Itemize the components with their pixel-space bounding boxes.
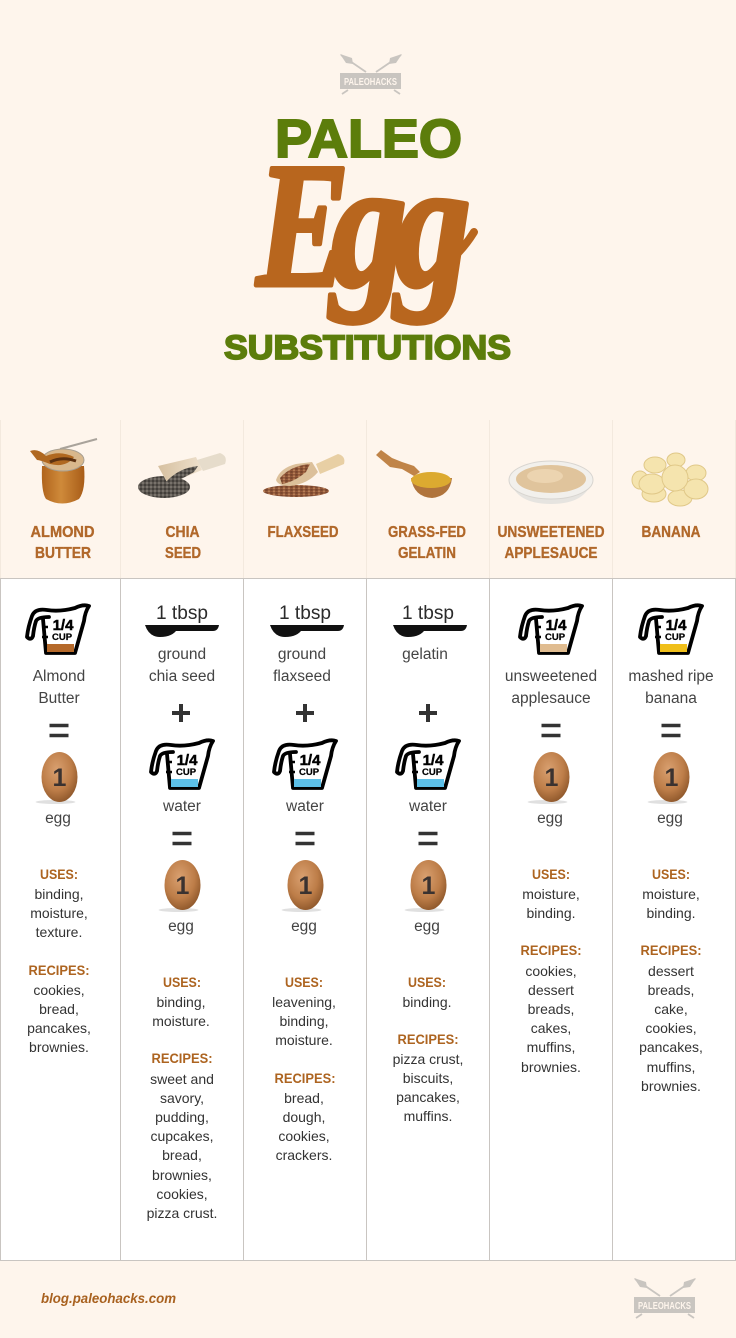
uses and recipes <box>520 867 582 1075</box>
icon: egg: 1 <box>545 764 559 792</box>
uses and recipes: USES: <box>40 867 78 882</box>
uses and recipes: moisture, <box>522 886 580 902</box>
icon: quarter cup: 1/4 <box>666 617 687 634</box>
icon: egg <box>528 752 570 804</box>
ingredient text: ground <box>278 646 326 663</box>
label: grass-fed gelatin: GRASS-FED <box>388 524 466 541</box>
uses and recipes: breads, <box>648 982 694 998</box>
uses and recipes: crackers. <box>276 1147 332 1163</box>
label: banana: BANANA <box>642 524 701 541</box>
ingredient text: ground <box>158 646 206 663</box>
uses and recipes: pancakes, <box>639 1039 703 1055</box>
icon: quarter cup <box>520 605 582 653</box>
uses and recipes: dessert <box>648 963 694 979</box>
equals sign <box>296 834 314 844</box>
uses and recipes: dessert <box>528 982 574 998</box>
uses and recipes: bread, <box>39 1001 79 1017</box>
uses and recipes: pizza crust, <box>393 1051 463 1067</box>
uses and recipes: cake, <box>654 1001 688 1017</box>
icon: egg <box>282 860 324 912</box>
icon: quarter cup water: 1/4 <box>423 752 444 769</box>
column: banana <box>628 453 714 1094</box>
uses and recipes: brownies, <box>152 1167 212 1183</box>
uses and recipes: moisture, <box>642 886 700 902</box>
icon: quarter cup water: 1/4 <box>177 752 198 769</box>
uses and recipes: pizza crust. <box>147 1205 217 1221</box>
uses and recipes: cookies, <box>278 1128 330 1144</box>
column: chia seed: water <box>162 798 201 815</box>
column: grass-fed gelatin <box>376 450 467 1124</box>
column: grass-fed gelatin: GELATIN <box>398 545 456 562</box>
photo: banana slices <box>632 453 708 506</box>
uses and recipes: breads, <box>528 1001 574 1017</box>
icon: quarter cup water <box>274 740 336 788</box>
uses and recipes: pudding, <box>155 1109 209 1125</box>
uses and recipes: binding, <box>156 994 206 1010</box>
uses and recipes: muffins. <box>404 1108 452 1124</box>
label: flaxseed: FLAXSEED <box>268 524 338 541</box>
title: Substitutions: SUBSTITUTIONS <box>224 329 511 367</box>
plus sign <box>296 704 314 722</box>
uses and recipes: muffins, <box>527 1039 575 1055</box>
ingredient text: gelatin <box>402 646 448 663</box>
icon: tablespoon: 1 tbsp <box>156 603 208 624</box>
uses and recipes: USES: <box>285 975 323 990</box>
icon: egg: 1 <box>422 872 436 900</box>
icon: quarter cup water: CUP <box>422 767 443 778</box>
equals sign <box>662 726 680 736</box>
icon: egg <box>404 860 446 912</box>
uses and recipes: pancakes, <box>396 1089 460 1105</box>
icon: egg <box>158 860 200 912</box>
ingredient text: mashed ripe <box>628 668 714 685</box>
equals sign <box>172 834 192 844</box>
uses and recipes: binding, <box>34 886 84 902</box>
icon: egg: 1 <box>176 872 190 900</box>
icon: quarter cup water <box>151 740 213 788</box>
icon: quarter cup: CUP <box>52 632 73 643</box>
icon: quarter cup water <box>397 740 459 788</box>
uses and recipes: RECIPES: <box>640 943 702 958</box>
column: unsweetened applesauce: egg <box>537 810 563 827</box>
icon: tablespoon: 1 tbsp <box>279 603 331 624</box>
column: almond butter: egg <box>45 810 71 827</box>
uses and recipes: cupcakes, <box>150 1128 214 1144</box>
uses and recipes: cookies, <box>33 982 85 998</box>
uses and recipes: cookies, <box>525 963 577 979</box>
uses and recipes: USES: <box>408 975 446 990</box>
icon: egg <box>648 752 690 804</box>
uses and recipes: brownies. <box>641 1078 701 1094</box>
equals sign <box>418 834 438 844</box>
column: unsweetened applesauce: applesauce <box>511 690 591 707</box>
equals sign <box>50 726 68 736</box>
uses and recipes <box>147 975 217 1221</box>
title: Egg: E <box>255 127 349 324</box>
icon: egg <box>36 752 78 804</box>
uses and recipes: leavening, <box>272 994 336 1010</box>
uses and recipes: moisture. <box>152 1013 210 1029</box>
uses and recipes: RECIPES: <box>398 1032 458 1047</box>
uses and recipes: pancakes, <box>27 1020 91 1036</box>
column: unsweetened applesauce <box>498 461 604 1075</box>
icon: quarter cup <box>640 605 702 653</box>
photo: almond butter jar <box>30 439 97 504</box>
uses and recipes: moisture. <box>275 1032 333 1048</box>
uses and recipes: binding. <box>526 905 576 921</box>
icon: quarter cup: 1/4 <box>546 617 567 634</box>
uses and recipes: RECIPES: <box>520 943 582 958</box>
uses and recipes: binding. <box>646 905 696 921</box>
uses and recipes: binding, <box>279 1013 329 1029</box>
uses and recipes: USES: <box>532 867 570 882</box>
column: flaxseed <box>263 454 344 1163</box>
uses and recipes: cookies, <box>156 1186 208 1202</box>
plus sign <box>172 704 190 722</box>
column: chia seed: chia seed <box>149 668 215 685</box>
uses and recipes: brownies. <box>521 1059 581 1075</box>
ingredient text: unsweetened <box>505 668 597 685</box>
title: Egg <box>255 125 474 324</box>
icon: quarter cup <box>27 605 89 653</box>
icon: quarter cup: CUP <box>545 632 566 643</box>
icon: egg: 1 <box>665 764 679 792</box>
uses and recipes: USES: <box>652 867 690 882</box>
table body panel <box>0 578 736 1260</box>
icon: egg: 1 <box>299 872 313 900</box>
ingredient text: Almond <box>33 668 85 685</box>
column: almond butter <box>27 439 97 1055</box>
column: banana: egg <box>657 810 683 827</box>
icon: quarter cup: CUP <box>665 632 686 643</box>
icon: tablespoon <box>145 603 219 637</box>
footer url: blog.paleohacks.com <box>41 1291 176 1306</box>
title: Egg: g <box>328 125 407 324</box>
icon: quarter cup water: CUP <box>176 767 197 778</box>
photo: gelatin spoon <box>376 450 452 498</box>
label: almond butter: ALMOND <box>30 524 94 541</box>
title <box>224 109 511 367</box>
icon: quarter cup water: CUP <box>299 767 320 778</box>
uses and recipes: sweet and <box>150 1071 214 1087</box>
icon: tablespoon <box>270 603 344 637</box>
uses and recipes: moisture, <box>30 905 88 921</box>
uses and recipes: biscuits, <box>403 1070 453 1086</box>
uses and recipes: USES: <box>163 975 201 990</box>
column: chia seed: SEED <box>165 545 201 562</box>
uses and recipes: binding. <box>402 994 452 1010</box>
uses and recipes: RECIPES: <box>28 963 90 978</box>
column: grass-fed gelatin: egg <box>414 918 440 935</box>
label: chia seed: CHIA <box>166 524 200 541</box>
photo: chia seed scoop <box>138 453 226 498</box>
column: grass-fed gelatin: water <box>408 798 447 815</box>
title: Egg: g <box>392 125 471 324</box>
column: chia seed <box>138 453 226 1221</box>
column: almond butter: Butter <box>38 690 80 707</box>
column: unsweetened applesauce: APPLESAUCE <box>504 545 598 562</box>
icon: egg: 1 <box>53 764 67 792</box>
title: Paleo: PALEO <box>275 109 462 169</box>
column: banana: banana <box>645 690 697 707</box>
column: chia seed: egg <box>168 918 194 935</box>
icon: tablespoon: 1 tbsp <box>402 603 454 624</box>
uses and recipes: cookies, <box>645 1020 697 1036</box>
uses and recipes: dough, <box>283 1109 325 1125</box>
uses and recipes: bread, <box>284 1090 324 1106</box>
photo: applesauce bowl <box>509 461 593 504</box>
uses and recipes <box>27 867 91 1055</box>
uses and recipes: muffins, <box>647 1059 695 1075</box>
equals sign <box>542 726 560 736</box>
plus sign <box>419 704 437 722</box>
uses and recipes: texture. <box>36 924 82 940</box>
uses and recipes: brownies. <box>29 1039 89 1055</box>
uses and recipes <box>639 867 703 1094</box>
uses and recipes: bread, <box>162 1147 202 1163</box>
logo: PaleoHacks top: PALEOHACKS <box>344 76 397 88</box>
column: almond butter: BUTTER <box>35 545 91 562</box>
column: flaxseed: flaxseed <box>273 668 331 685</box>
photo: flaxseed scoop <box>263 454 344 497</box>
uses and recipes: RECIPES: <box>152 1051 212 1066</box>
icon: tablespoon <box>393 603 467 637</box>
uses and recipes: RECIPES: <box>274 1071 336 1086</box>
column: flaxseed: water <box>285 798 324 815</box>
icon: quarter cup water: 1/4 <box>300 752 321 769</box>
logo: PaleoHacks top <box>340 54 402 94</box>
column: flaxseed: egg <box>291 918 317 935</box>
icon: quarter cup: 1/4 <box>53 617 74 634</box>
logo: PaleoHacks bottom: PALEOHACKS <box>638 1300 691 1312</box>
uses and recipes <box>272 975 336 1163</box>
uses and recipes: cakes, <box>531 1020 571 1036</box>
label: unsweetened applesauce: UNSWEETENED <box>498 524 604 541</box>
uses and recipes <box>393 975 463 1124</box>
logo: PaleoHacks bottom <box>634 1278 696 1318</box>
uses and recipes: savory, <box>160 1090 204 1106</box>
